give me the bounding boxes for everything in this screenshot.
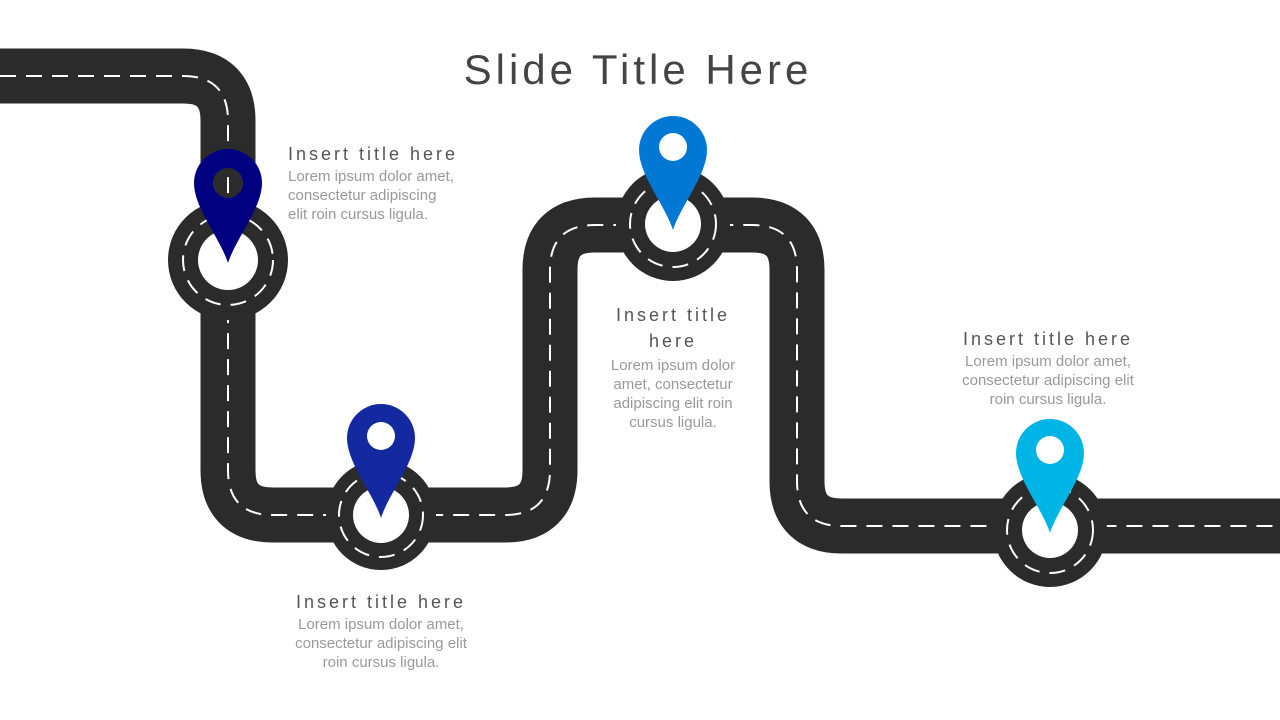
text block 1: elit roin cursus ligula. (288, 206, 428, 223)
text block 1: Lorem ipsum dolor amet, (288, 168, 454, 185)
text block 3: here (649, 331, 697, 351)
text block 4: roin cursus ligula. (990, 391, 1106, 408)
text block 3: Lorem ipsum dolor (611, 357, 735, 374)
pin 2 (347, 404, 415, 518)
road (0, 76, 1280, 526)
pin 3 (639, 116, 707, 230)
text block 4: consectetur adipiscing elit (962, 372, 1134, 389)
text block 3 (611, 305, 735, 431)
text block 1 (288, 144, 458, 223)
text block 3: cursus ligula. (629, 414, 717, 431)
text block 3: Insert title (616, 305, 730, 325)
text block 4: Insert title here (963, 329, 1133, 349)
roundabouts (168, 167, 1107, 587)
text block 2: roin cursus ligula. (323, 654, 439, 671)
text block 2: Lorem ipsum dolor amet, (298, 616, 464, 633)
text block 2: consectetur adipiscing elit (295, 635, 467, 652)
title: Slide Title Here (464, 46, 812, 93)
text block 4 (962, 329, 1134, 408)
text block 1: Insert title here (288, 144, 458, 164)
text block 3: amet, consectetur (613, 376, 733, 393)
text block 2 (295, 592, 467, 671)
pin 4 (1016, 419, 1084, 533)
text block 1: consectetur adipiscing (288, 187, 436, 204)
text block 4: Lorem ipsum dolor amet, (965, 353, 1131, 370)
text block 3: adipiscing elit roin (613, 395, 733, 412)
text block 2: Insert title here (296, 592, 466, 612)
pin 1 (194, 149, 262, 263)
